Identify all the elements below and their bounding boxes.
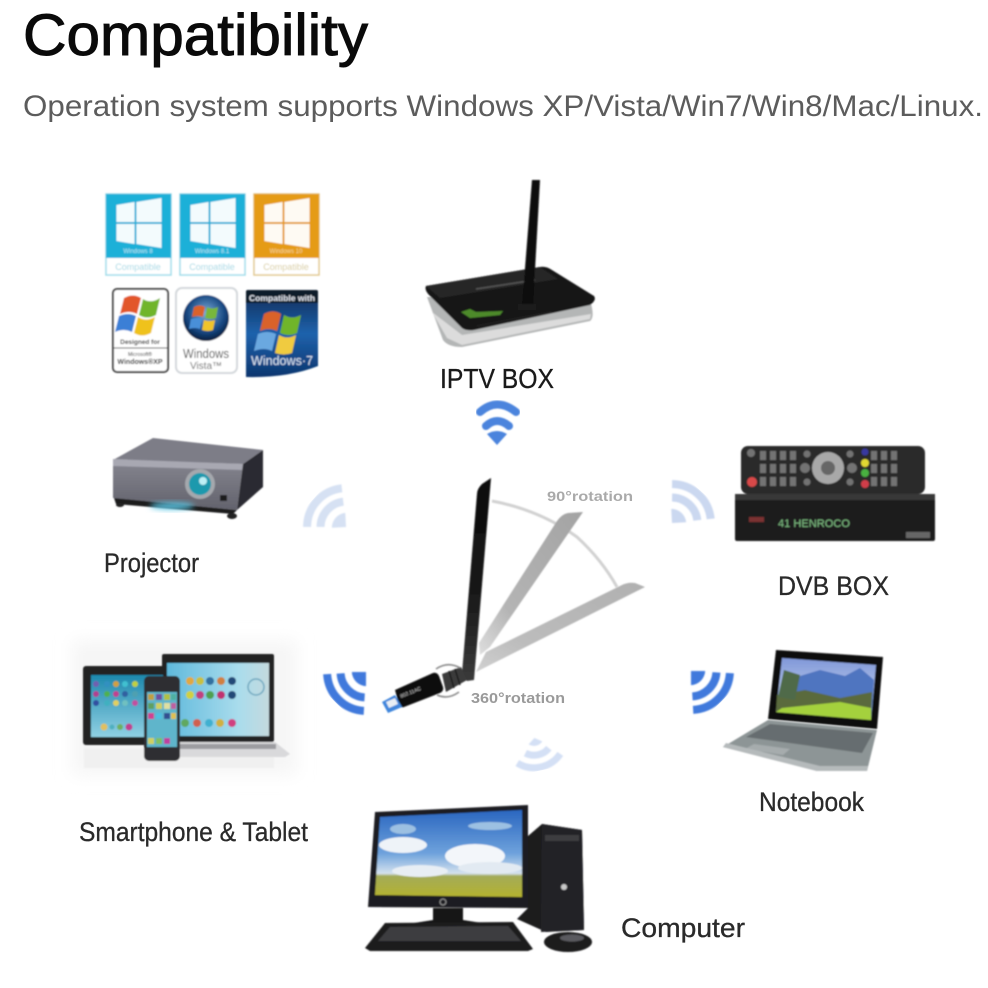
icon: wifi tablet	[320, 654, 384, 718]
badge: Windows 10	[254, 194, 319, 275]
reflection	[84, 748, 274, 768]
badge: Windows 8	[106, 194, 171, 275]
device: smartphone and tablet	[83, 654, 290, 768]
label: 360 degree rotation: 360°rotation	[471, 691, 565, 707]
badge: Windows 10: Compatible	[263, 262, 309, 272]
title: Compatibility	[23, 3, 368, 68]
badge: Windows 8.1: Compatible	[189, 262, 235, 272]
device: notebook	[723, 650, 883, 771]
rotation arc	[492, 501, 617, 587]
badge: Windows 8: Windows 8	[123, 249, 153, 255]
badge: Windows Vista: Windows	[183, 346, 229, 361]
ghost antenna 45 degrees	[479, 512, 583, 655]
center: USB adapter with antenna	[382, 478, 645, 713]
label: Projector: Projector	[104, 548, 199, 578]
badge: Windows XP	[113, 289, 168, 372]
remote control	[741, 446, 925, 494]
badge: Windows 8.1	[180, 194, 245, 275]
badge: Windows 10: Windows 10	[270, 249, 303, 255]
soft backdrop behind tablets	[72, 640, 297, 775]
device: DVB box: 41 HENROCO	[778, 518, 850, 530]
icon: wifi projector	[300, 482, 363, 546]
label: Computer: Computer	[621, 913, 745, 943]
label: IPTV BOX: IPTV BOX	[440, 363, 554, 394]
swivel joint	[442, 667, 467, 692]
360 rotation arrows	[436, 665, 460, 697]
badge: Windows XP: Windows®XP	[117, 358, 163, 366]
panel: operating system badges	[106, 194, 319, 377]
monitor	[368, 805, 528, 923]
tower	[517, 824, 584, 932]
badge: Windows Vista: Vista™	[190, 361, 222, 372]
device: DVB box	[735, 446, 935, 541]
badge: Windows 7	[246, 290, 318, 377]
badge: Windows XP: Designed for	[120, 339, 160, 346]
device: IPTV box	[426, 180, 595, 347]
badge: Windows Vista	[176, 288, 237, 373]
label: Notebook: Notebook	[759, 787, 864, 817]
black antenna	[462, 478, 491, 681]
label: 90 degree rotation: 90°rotation	[547, 488, 633, 504]
mouse	[544, 932, 592, 952]
receiver	[735, 494, 935, 541]
label: Smartphone & Tablet: Smartphone & Tablet	[79, 817, 308, 847]
badge: Windows 8: Compatible	[115, 262, 161, 272]
ghost antenna 90 degrees	[476, 583, 645, 672]
usb connector	[382, 695, 402, 713]
device: computer	[365, 805, 592, 952]
keyboard	[365, 922, 533, 951]
laptop	[162, 654, 290, 757]
device: projector	[113, 438, 263, 519]
phone	[144, 676, 180, 761]
badge: Windows XP: Microsoft®	[128, 351, 152, 358]
icon: wifi computer	[513, 733, 562, 772]
badge: Windows 7: Windows·7	[251, 353, 313, 368]
tablet	[83, 666, 165, 745]
badge: Windows 8.1: Windows 8.1	[195, 249, 230, 255]
icon: wifi DVB	[653, 477, 717, 540]
dongle body	[395, 673, 443, 707]
icon: wifi top	[480, 404, 516, 445]
label: DVB BOX: DVB BOX	[778, 571, 889, 601]
badge: Windows 7: Compatible with	[249, 293, 315, 303]
subtitle: Operation system supports Windows XP/Vista/Win7/Win8/Mac/Linux.	[23, 90, 983, 123]
icon: wifi notebook	[673, 653, 737, 717]
projector light glow	[150, 502, 194, 510]
center: USB adapter with antenna: 802.11AC	[400, 686, 422, 700]
